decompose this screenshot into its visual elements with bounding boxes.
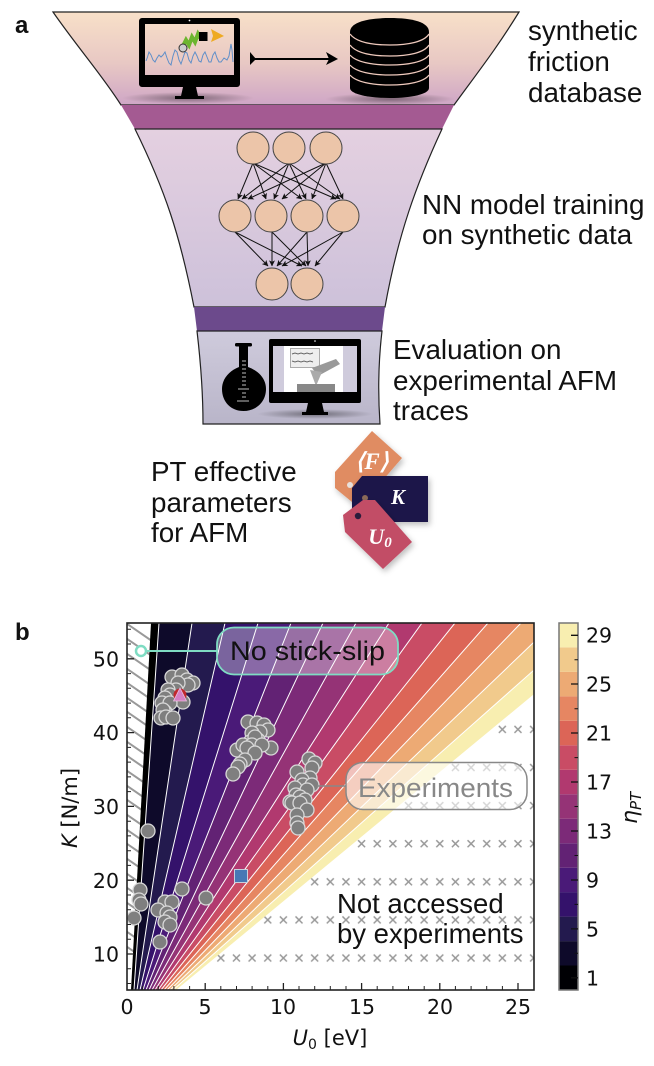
x axis tick labels [120, 995, 531, 1019]
x axis tick labels: 5 [198, 995, 212, 1019]
x axis title: [eV] [317, 1026, 367, 1050]
y axis tick labels [93, 648, 119, 966]
experimental data points [127, 668, 322, 949]
callout: experiments: Experiments [358, 773, 513, 803]
colorbar tick labels: 9 [586, 868, 599, 892]
text: synthetic friction database: friction [528, 46, 610, 77]
funnel section: evaluation [197, 331, 382, 424]
text: synthetic friction database: database [528, 77, 642, 108]
text: evaluation on experimental AFM traces: Evaluation on [393, 334, 561, 365]
colorbar tick labels: 1 [586, 966, 599, 990]
icon: tag K [352, 476, 428, 522]
callout: no stick-slip [136, 628, 398, 674]
icon: tag U0 [343, 500, 412, 569]
panel label: a: a [15, 12, 29, 39]
x axis tick labels: 0 [120, 995, 134, 1019]
text: PT effective parameters for AFM: PT effective [151, 456, 297, 487]
y axis tick labels: 20 [93, 869, 119, 893]
funnel connector band 1 [121, 105, 454, 129]
y axis tick labels: 50 [93, 648, 119, 672]
icon: database [325, 18, 455, 105]
no stick-slip hatched region [128, 624, 150, 952]
icon: monitor with AFM image [257, 339, 373, 419]
y axis tick labels: 40 [93, 721, 119, 745]
x axis tick labels: 10 [270, 995, 296, 1019]
colorbar tick labels: 29 [586, 624, 612, 648]
icon: tag F [335, 431, 402, 502]
colorbar title: PT [627, 790, 645, 810]
axes frame and ticks [127, 623, 534, 990]
arrow: simulation to database [250, 52, 338, 65]
text: not accessed by experiments: Not accessed [337, 888, 504, 919]
icon: tag U0: 0 [384, 535, 392, 551]
text: NN model training: on synthetic data [422, 219, 633, 250]
funnel section: synthetic database [53, 12, 519, 105]
contour bands [131, 624, 534, 990]
x axis title: U [293, 1026, 308, 1050]
text: evaluation on experimental AFM traces: experimental AFM [393, 365, 617, 396]
x axis title: 0 [308, 1037, 317, 1053]
text: NN model training: NN model training [422, 189, 644, 220]
icon: tag F: ⟨F⟩ [355, 449, 390, 474]
y axis tick labels: 30 [93, 795, 119, 819]
x axis tick labels: 20 [427, 995, 453, 1019]
colorbar tick labels [586, 624, 612, 990]
chart: neural network diagram [219, 132, 359, 300]
text: PT effective parameters for AFM: parameters [151, 487, 292, 518]
icon: tag K: K [390, 485, 407, 509]
marker: blue square [234, 870, 248, 882]
icon: monitor with friction simulation [122, 18, 254, 104]
colorbar [559, 623, 645, 990]
colorbar tick labels: 13 [586, 820, 612, 844]
colorbar tick labels: 21 [586, 722, 612, 746]
icon: tag U0: U [368, 524, 384, 549]
y axis title: K [N/m] [58, 768, 82, 848]
panel a: funnel workflow [53, 12, 644, 569]
y axis tick labels: 10 [93, 942, 119, 966]
funnel connector band 2 [194, 307, 385, 331]
x axis tick labels: 25 [505, 995, 531, 1019]
chart: eta PT phase diagram [60, 622, 535, 1049]
text: evaluation on experimental AFM traces: traces [393, 395, 469, 426]
x axis tick labels: 15 [349, 995, 375, 1019]
colorbar tick labels: 17 [586, 770, 612, 794]
marker: red circle with pink triangle [174, 688, 186, 702]
panel label: b: b [15, 619, 30, 646]
text: PT effective parameters for AFM: for AFM [151, 517, 248, 548]
callout: no stick-slip: No stick-slip [230, 636, 385, 666]
funnel section: NN training [135, 129, 442, 307]
colorbar title: η [618, 810, 643, 824]
callout: experiments [317, 762, 527, 810]
colorbar tick labels: 25 [586, 672, 612, 696]
colorbar tick labels: 5 [586, 918, 599, 942]
text: synthetic friction database: synthetic [528, 15, 638, 46]
text: not accessed by experiments: by experiments [337, 918, 523, 949]
not-accessed cross markers [215, 723, 534, 964]
icon: flask [222, 343, 266, 411]
